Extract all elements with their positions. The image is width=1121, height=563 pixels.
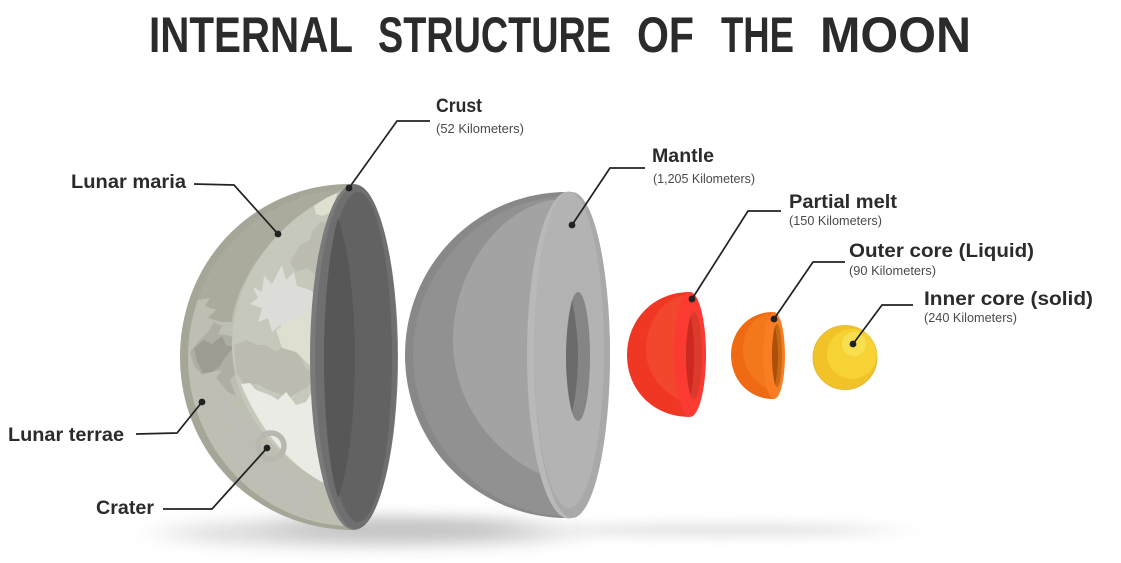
mantle front face — [527, 192, 610, 518]
gray maria patch centre — [234, 340, 316, 398]
inner core — [813, 326, 877, 390]
crater — [258, 433, 284, 459]
label: lunar maria: Lunar maria — [71, 172, 186, 193]
label: mantle — [569, 146, 755, 228]
partial melt layer — [627, 292, 706, 417]
label: crater — [96, 445, 270, 519]
gray maria patch upper — [290, 212, 345, 280]
mantle face centre — [534, 192, 604, 508]
ground shadow — [165, 519, 890, 547]
inner core bright spot — [842, 332, 866, 356]
mantle front edge — [534, 192, 610, 518]
mantle outer rim — [405, 192, 567, 518]
moon crust shell — [180, 184, 398, 530]
label: crust: Crust — [436, 96, 483, 117]
white highlands — [241, 382, 335, 482]
rim band — [315, 185, 397, 529]
outer core hole shade — [772, 326, 778, 385]
mantle — [405, 192, 610, 518]
label: crater: Crater — [96, 498, 155, 519]
partial melt front face — [674, 292, 706, 417]
label: outer core: (90 Kilometers) — [849, 264, 936, 278]
mantle light side — [453, 200, 560, 473]
title: THE — [721, 7, 794, 63]
outer core light side — [743, 314, 768, 388]
label: outer core — [771, 241, 1034, 322]
label: outer core: Outer core (Liquid) — [849, 241, 1034, 262]
label: partial melt — [689, 192, 898, 302]
mantle hole shade — [566, 300, 578, 412]
mottled rim flecks — [202, 197, 300, 297]
title: OF — [637, 7, 694, 63]
label: crust — [346, 96, 524, 191]
hollow interior — [324, 192, 392, 522]
mantle band — [413, 197, 560, 516]
outer core shell — [731, 312, 773, 399]
outer core front face — [763, 312, 785, 399]
title: MOON — [820, 7, 971, 63]
outer core hole — [772, 324, 782, 387]
label: lunar maria — [71, 172, 281, 237]
bright splash — [250, 265, 322, 335]
label: inner core: (240 Kilometers) — [924, 311, 1017, 325]
label: mantle: (1,205 Kilometers) — [653, 172, 755, 186]
label: lunar terrae: Lunar terrae — [8, 425, 124, 446]
title: INTERNAL — [149, 7, 353, 63]
lunar surface band — [188, 190, 352, 526]
crust front rim — [310, 184, 398, 530]
top pale patch — [314, 193, 337, 216]
label: inner core — [850, 289, 1093, 347]
partial melt shell — [627, 292, 690, 417]
inner core highlight — [827, 329, 877, 379]
label: partial melt: Partial melt — [789, 192, 898, 213]
label: partial melt: (150 Kilometers) — [789, 214, 882, 228]
title: STRUCTURE — [378, 7, 611, 63]
partial melt hole — [686, 312, 702, 399]
label: crust: (52 Kilometers) — [436, 122, 524, 136]
label: inner core: Inner core (solid) — [924, 289, 1093, 310]
surface texture — [190, 190, 341, 396]
inner core sphere — [813, 326, 877, 390]
outer core — [731, 312, 785, 399]
interior shaded crescent — [324, 218, 355, 498]
light side of moon — [232, 193, 345, 482]
pale highlight — [276, 305, 335, 378]
outer rim — [180, 184, 353, 530]
partial melt light side — [646, 296, 685, 400]
mantle hole — [566, 292, 590, 421]
label: lunar terrae — [8, 399, 205, 446]
title — [149, 7, 971, 63]
partial melt hole shade — [686, 316, 694, 396]
label: mantle: Mantle — [652, 146, 714, 167]
